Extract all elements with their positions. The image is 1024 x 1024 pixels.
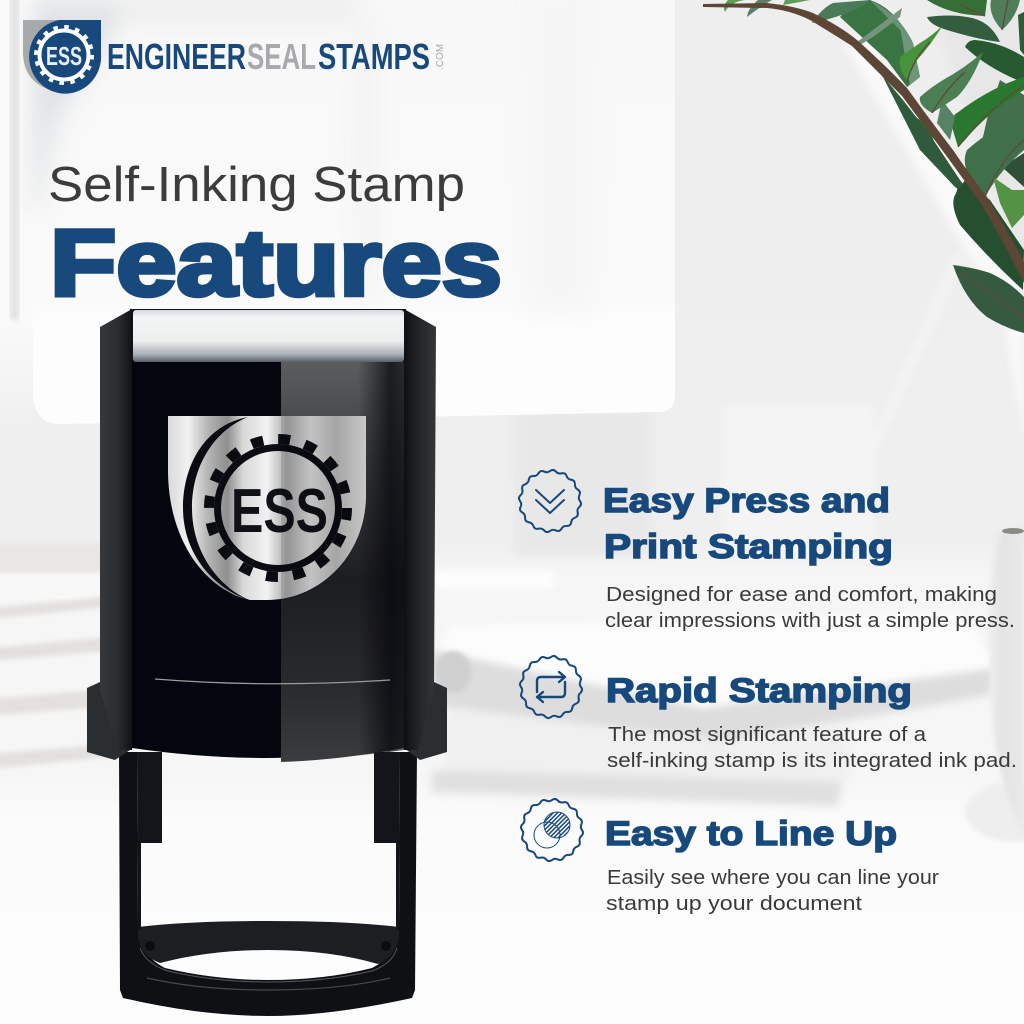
- heading: Easy Press and: [603, 482, 890, 520]
- icon: repeat arrows: [518, 654, 584, 720]
- heading: Print Stamping: [604, 528, 893, 566]
- silver ESS emblem: ESS: [231, 477, 328, 546]
- description: Easily see where you can line your: [607, 867, 939, 889]
- monitor screen panel: [10, 0, 675, 424]
- logo .com: .COM: [435, 44, 446, 70]
- self-inking stamp product: [87, 309, 447, 1016]
- heading: Rapid Stamping: [606, 672, 912, 710]
- icon: double chevron down: [517, 468, 583, 534]
- description: clear impressions with just a simple press.: [605, 610, 1015, 632]
- clear top window: [133, 310, 404, 362]
- plant with leaves: [703, 0, 1024, 333]
- stamp outer body: [100, 309, 436, 750]
- logo wordmark: SEAL: [247, 36, 316, 77]
- description: The most significant feature of a: [608, 724, 927, 746]
- logo: [23, 20, 446, 94]
- keyboard and mug detail: [435, 526, 1024, 842]
- description: Designed for ease and comfort, making: [606, 584, 997, 606]
- feature: rapid stamping: [518, 654, 1017, 772]
- description: [605, 584, 1015, 632]
- logo wordmark: [107, 36, 430, 77]
- heading: [603, 482, 893, 566]
- stamp front reflection: [281, 362, 404, 762]
- description: self-inking stamp is its integrated ink pad.: [607, 750, 1017, 772]
- icon: overlapping circles: [519, 797, 585, 863]
- silver ESS emblem: [168, 416, 366, 601]
- description: [607, 724, 1017, 772]
- stamp base frame: [119, 752, 417, 1016]
- description: [606, 867, 939, 915]
- logo wordmark: STAMPS: [318, 36, 430, 77]
- feature: easy to line up: [519, 797, 939, 915]
- body seam line: [155, 679, 390, 684]
- logo wordmark: ENGINEER: [107, 36, 246, 77]
- stamp flanges: [87, 682, 447, 760]
- heading: Easy to Line Up: [605, 815, 897, 853]
- logo badge: ESS: [46, 41, 82, 71]
- stamp front face: [132, 360, 404, 758]
- title line two: Features: [50, 210, 502, 315]
- title line one: Self-Inking Stamp: [48, 158, 465, 212]
- title: [48, 158, 502, 315]
- logo badge: [23, 20, 101, 94]
- feature: easy press and print stamping: [517, 468, 1015, 632]
- description: stamp up your document: [606, 893, 863, 915]
